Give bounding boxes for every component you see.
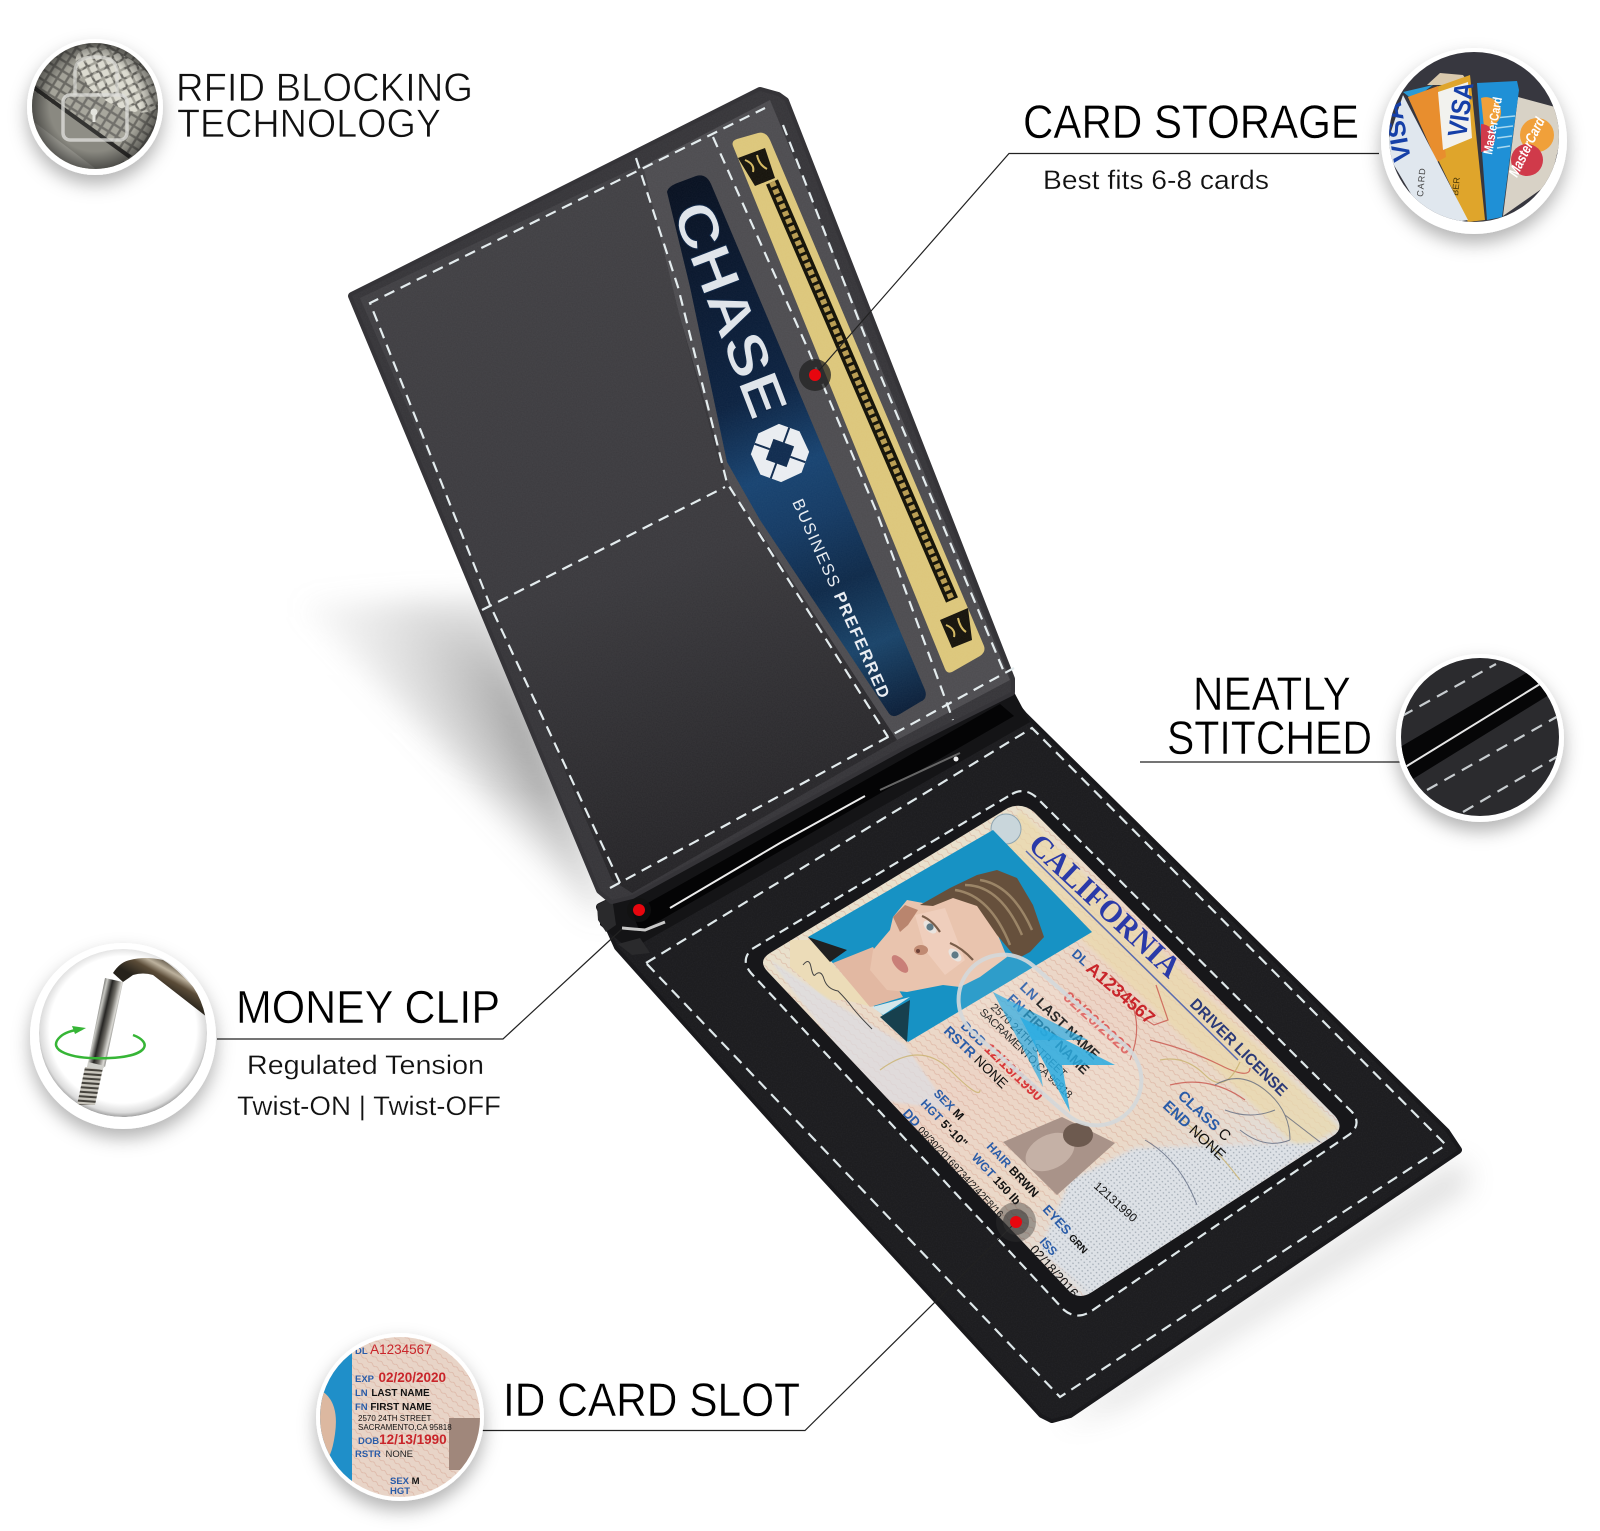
heading: RFID blocking technology: TECHNOLOGY <box>177 102 441 146</box>
card slot strip <box>643 100 1010 740</box>
ID card in window <box>763 806 1340 1296</box>
ID text: EYES GRN <box>1040 1202 1092 1256</box>
gold card <box>732 133 984 673</box>
front pocket <box>360 166 897 893</box>
callout leader: card storage <box>799 154 1379 391</box>
icon: ID close-up: DL A1234567 <box>355 1342 432 1357</box>
Chase card: CHASE <box>661 193 801 426</box>
icon: ID close-up <box>315 1333 485 1504</box>
feature: money clip <box>30 943 501 1129</box>
text: regulated tension: Twist-ON | Twist-OFF <box>237 1091 501 1121</box>
rotation arrow <box>56 1026 145 1058</box>
ID photo <box>808 830 1092 1042</box>
wallet: upper panel <box>352 91 1014 900</box>
ID text: LN LAST NAME <box>1017 979 1103 1063</box>
ID text: 02/18/2016 <box>1027 1242 1081 1300</box>
icon: ID close-up: SACRAMENTO,CA 95818 <box>358 1423 452 1432</box>
icon: ID close-up: LN LAST NAME <box>355 1388 430 1399</box>
card: white Visa <box>1389 95 1468 221</box>
ID text: CALIFORNIA <box>1022 827 1188 985</box>
ID text: SEX M <box>931 1086 967 1123</box>
feature: neatly stitched <box>1167 654 1565 830</box>
text: best fits: Best fits 6-8 cards <box>1043 165 1269 195</box>
wallet cast shadow <box>300 590 1470 1425</box>
ID text: DD 09/30/20169734/2/42F8/16 <box>900 1106 1008 1221</box>
card: gold Visa <box>1408 75 1485 222</box>
icon: ID close-up: HGT <box>390 1486 410 1497</box>
text: regulated tension: Regulated Tension <box>247 1050 484 1080</box>
ID seal <box>991 814 1021 844</box>
callout leader: neatly stitched <box>1140 761 1400 763</box>
marker: card storage <box>799 359 831 391</box>
heading: RFID blocking technology: RFID BLOCKING <box>176 66 473 110</box>
ID ghost photo <box>1003 1117 1115 1195</box>
ID map lines <box>1110 975 1250 1100</box>
ID text: A1234567 <box>1082 958 1159 1028</box>
ID text <box>900 827 1290 1300</box>
stitching: ID window frame <box>746 791 1357 1316</box>
card: blue MasterCard <box>1477 81 1519 220</box>
callout leader: money clip <box>217 898 651 1039</box>
card: white Visa: VISA <box>1379 100 1417 164</box>
card: blue MasterCard: MasterCard <box>1480 96 1505 156</box>
ID text: DL <box>1069 946 1092 969</box>
ID text: 02/20/2020 <box>1059 988 1135 1059</box>
feature: ID card slot <box>315 1333 800 1504</box>
card: gray MasterCard <box>1503 97 1562 216</box>
icon: credit cards <box>1379 48 1567 234</box>
ID text: RSTR NONE <box>941 1023 1011 1091</box>
ID text: CLASS C <box>1174 1087 1234 1145</box>
Chase octagon logo <box>745 418 815 488</box>
card: gray MasterCard: MasterCard <box>1506 114 1549 180</box>
icon: money clip screw <box>30 943 216 1129</box>
wallet: lower panel with ID window <box>600 704 1458 1419</box>
icon: RFID fabric with lock <box>25 34 171 178</box>
ID text: ISS <box>1037 1235 1060 1258</box>
icon: ID close-up: FN FIRST NAME <box>355 1402 432 1413</box>
wallet: hinge band and money clip <box>597 692 1030 955</box>
card: white Visa: CARD <box>1415 167 1428 197</box>
marker: ID card slot <box>996 1202 1036 1242</box>
heading: neatly stitched: STITCHED <box>1167 711 1372 764</box>
stitching: upper panel <box>370 108 1014 888</box>
ID text: SACRAMENTO,CA 95818 <box>977 1007 1074 1101</box>
icon: stitching close-up <box>1395 654 1565 830</box>
icon: ID close-up: SEX M <box>390 1476 420 1487</box>
feature: RFID blocking <box>25 34 484 178</box>
icon: ID close-up: EXP 02/20/2020 <box>355 1370 446 1385</box>
heading: neatly stitched: NEATLY <box>1193 667 1350 720</box>
card: gold Visa: BER <box>1450 176 1462 196</box>
ID text: HGT 5'-10" <box>918 1096 970 1150</box>
heading: ID card slot: ID CARD SLOT <box>503 1373 800 1426</box>
icon: ID close-up: DOB12/13/1990 <box>358 1432 447 1447</box>
card: gold Visa: VISA <box>1442 80 1480 139</box>
ID text: FN FIRST NAME <box>1004 991 1093 1077</box>
logo overlay: ring and chevrons <box>956 952 1144 1128</box>
marker: money clip <box>627 898 651 922</box>
feature: card storage <box>1023 48 1567 234</box>
Chase card <box>661 175 926 716</box>
ID text: DOB 12/13/1990 <box>957 1018 1046 1105</box>
ID text: 2570 24TH STREET <box>988 1002 1069 1080</box>
callout leader: ID card slot <box>480 1202 1036 1430</box>
ID text: WGT 150 lb <box>969 1150 1024 1208</box>
stitching: lower panel outer <box>646 728 1446 1397</box>
ID text: HAIR BRWN <box>984 1139 1042 1200</box>
ID signature <box>803 961 872 1029</box>
Chase card: BUSINESS PREFERRED <box>788 496 893 701</box>
icon: ID close-up: 2570 24TH STREET <box>358 1414 431 1423</box>
ID text: 12131990 <box>1091 1179 1140 1225</box>
heading: money clip: MONEY CLIP <box>236 981 500 1033</box>
ID text: DRIVER LICENSE <box>1186 996 1290 1100</box>
icon: ID close-up: RSTR NONE <box>355 1449 413 1460</box>
heading: card storage: CARD STORAGE <box>1023 95 1359 148</box>
ID text: END NONE <box>1159 1097 1229 1164</box>
